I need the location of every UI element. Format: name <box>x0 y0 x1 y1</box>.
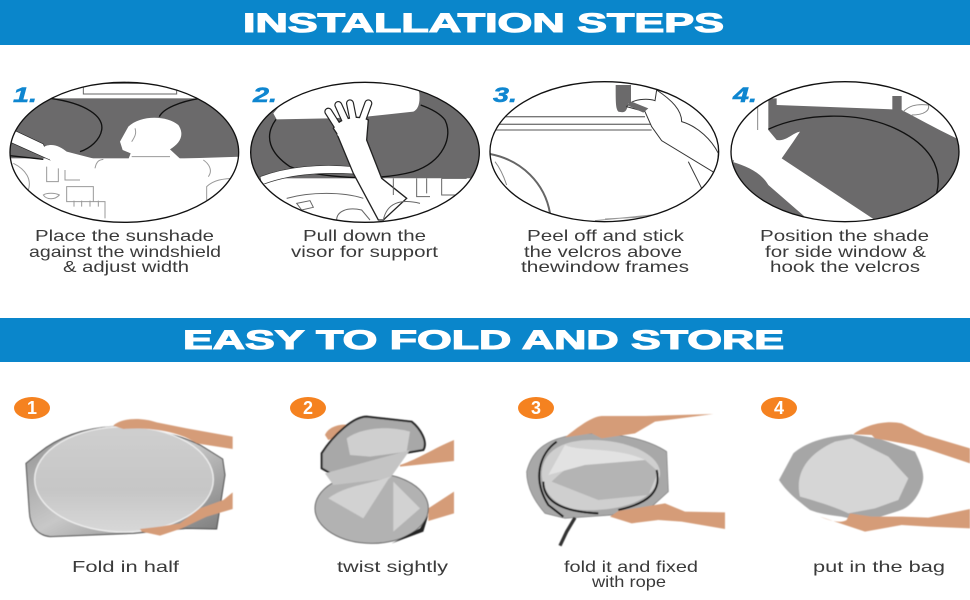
step 4 illustration: positioning the side window shade <box>731 82 960 223</box>
header banner: easy to fold and store <box>0 318 970 362</box>
photo 2: twisting the shade <box>315 417 454 543</box>
caption: step 2 <box>291 228 439 261</box>
caption: step 1: against the windshield <box>29 244 221 261</box>
step numbers: 1. <box>13 84 37 107</box>
caption: fold step 3: with rope <box>591 574 666 591</box>
caption: step 2: Pull down the <box>303 228 426 245</box>
caption: step 1 <box>29 228 221 276</box>
photo 4: ready for the bag <box>779 422 970 532</box>
step numbers: 2. <box>252 84 277 107</box>
caption: fold step 3: fold it and fixed <box>564 559 698 576</box>
step 1 illustration: person placing sunshade <box>9 82 240 223</box>
badge 3 <box>518 397 554 419</box>
caption: step 3 <box>521 228 689 276</box>
step numbers: 3. <box>493 84 517 107</box>
badge 1 <box>14 397 50 419</box>
step numbers <box>13 84 757 107</box>
step numbers: 4. <box>732 84 757 107</box>
caption: step 4 <box>760 228 929 276</box>
caption: step 3: Peel off and stick <box>527 228 685 245</box>
photo 3: folded with rope <box>527 414 725 546</box>
header banner: easy to fold and store: EASY TO FOLD AND STORE <box>183 325 784 355</box>
photo 1: shade folded in half <box>26 419 233 537</box>
caption: step 4: Position the shade <box>760 228 929 245</box>
badge 3: 3 <box>531 398 541 418</box>
caption: step 1: & adjust width <box>63 259 189 276</box>
header banner: installation steps <box>0 0 970 45</box>
badge 4: 4 <box>774 398 784 418</box>
caption: step 1: Place the sunshade <box>35 228 214 245</box>
caption: step 4: for side window & <box>765 244 926 261</box>
caption: fold step 1: Fold in half <box>72 559 180 576</box>
step 3 illustration: sticking the velcros <box>490 82 719 222</box>
step 2 illustration: pulling down the visor <box>250 82 480 223</box>
header banner: installation steps: INSTALLATION STEPS <box>243 8 724 38</box>
caption: step 4: hook the velcros <box>770 259 920 276</box>
caption: fold step 3 <box>564 559 698 591</box>
caption: step 3: thewindow frames <box>521 259 689 276</box>
badge 2 <box>290 397 326 419</box>
badge 1: 1 <box>27 398 37 418</box>
caption: fold step 4: put in the bag <box>813 559 945 576</box>
caption: step 3: the velcros above <box>524 244 682 261</box>
badge 4 <box>761 397 797 419</box>
badge 2: 2 <box>303 398 313 418</box>
caption: step 2: visor for support <box>291 244 439 261</box>
caption: fold step 2: twist sightly <box>337 559 448 576</box>
